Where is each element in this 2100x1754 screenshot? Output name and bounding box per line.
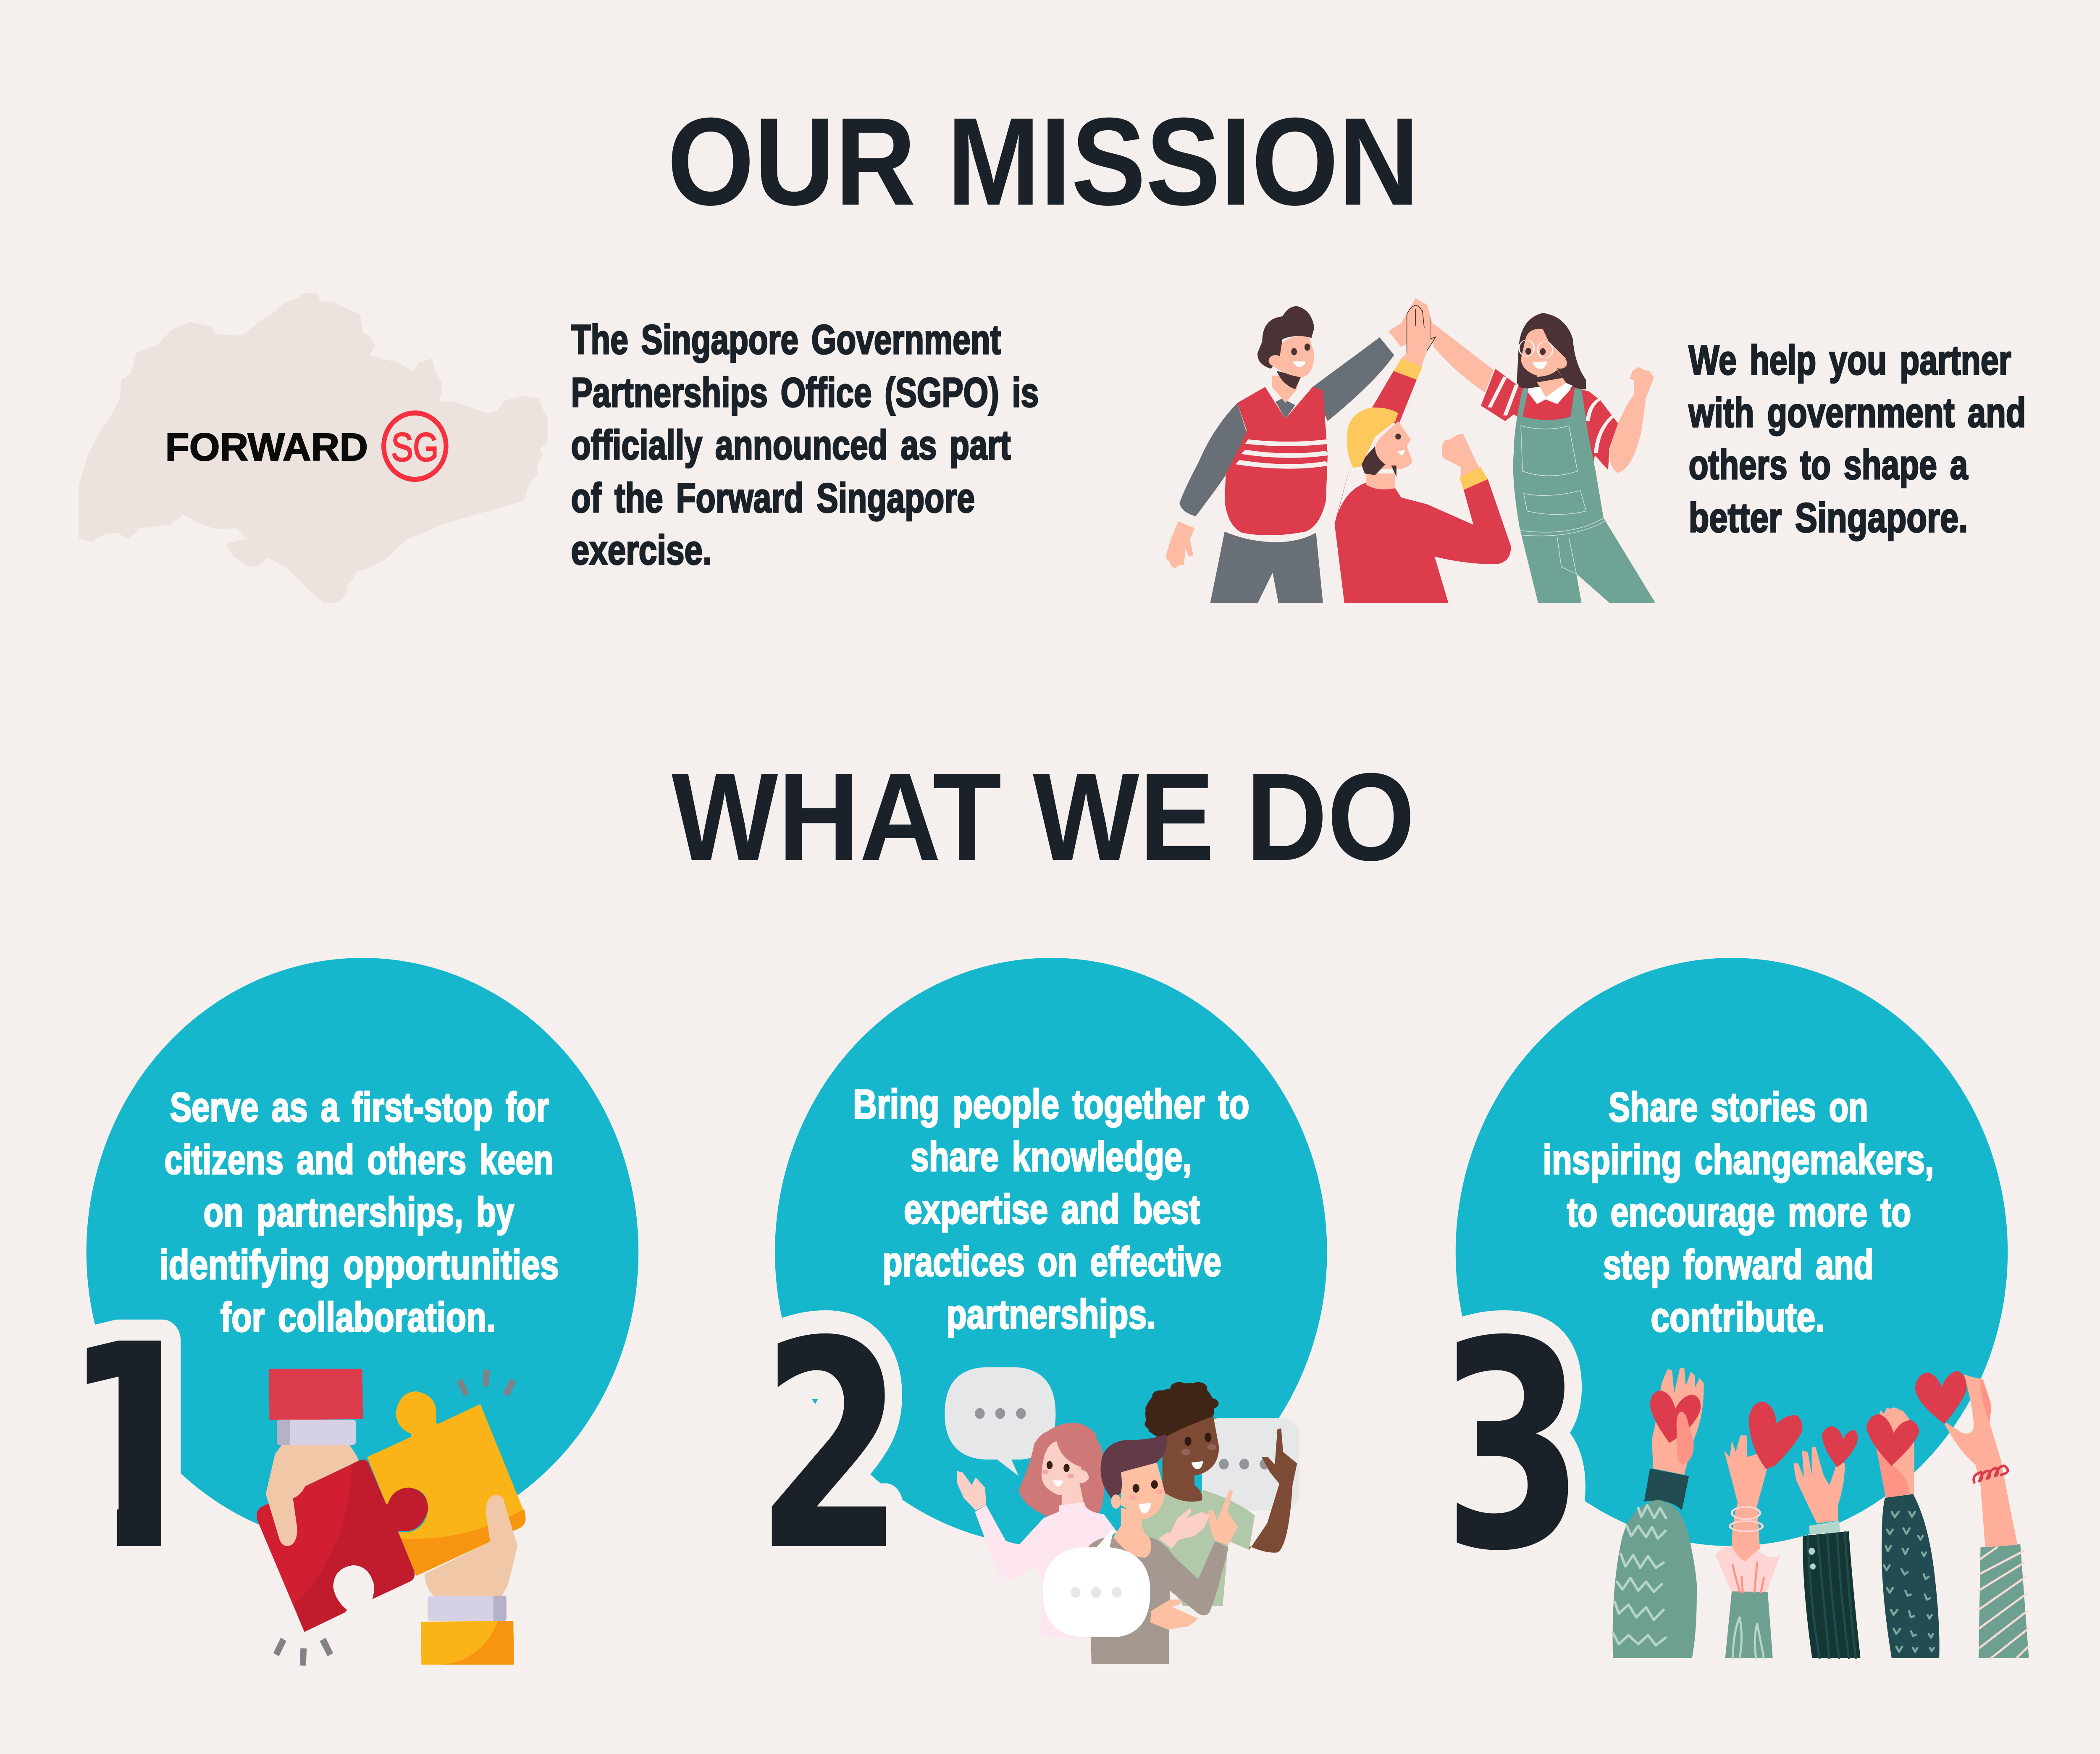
hand 4 [1866, 1407, 1940, 1658]
illustration: people high five [1166, 298, 1656, 603]
circle 1 [87, 958, 638, 1546]
woman with pink hair [957, 1423, 1117, 1639]
number 1 halo: 1 [49, 1284, 220, 1613]
number 3 halo: 3 [1436, 1281, 1585, 1614]
mission text left [571, 317, 1039, 573]
logo sg: SG [391, 424, 438, 470]
step 2 text: expertise and best [904, 1186, 1200, 1233]
illustration: people talking [811, 1367, 1299, 1664]
step 3 text: step forward and [1603, 1242, 1874, 1288]
number 2 halo: 2 [755, 1281, 905, 1614]
singapore map with forward sg logo [79, 293, 548, 603]
step 2 text: practices on effective [882, 1239, 1221, 1285]
number 3: 3 [1436, 1281, 1585, 1614]
illustration: puzzle hands [257, 1369, 525, 1666]
step 1 text [159, 1084, 559, 1341]
hand 3 [1793, 1426, 1861, 1658]
mission text right [1688, 337, 2026, 541]
panel: step 2 [755, 958, 1327, 1664]
step 3 text: Share stories on [1609, 1084, 1868, 1131]
step 1 text: identifying opportunities [159, 1242, 559, 1288]
speech bubble left [945, 1367, 1055, 1476]
title: what we do: WHAT WE DO [672, 747, 1415, 887]
speech bubble white [1043, 1527, 1150, 1637]
mission text left: The Singapore Government [571, 317, 1001, 363]
number 2: 2 [755, 1281, 905, 1614]
step 3 text: inspiring changemakers, [1543, 1137, 1934, 1183]
hand 2 [1715, 1402, 1802, 1658]
mission text left: Partnerships Office (SGPO) is [571, 370, 1039, 416]
speech bubble right [1202, 1418, 1299, 1510]
panel: step 3 [1436, 958, 2029, 1658]
panel: step 1 [49, 958, 638, 1666]
circle 3 [1456, 958, 2008, 1546]
step 3 text: contribute. [1651, 1294, 1825, 1341]
circle 2 [775, 958, 1327, 1546]
mission text right: others to shape a [1689, 442, 1968, 488]
step 1 text: for collaboration. [220, 1294, 496, 1341]
map silhouette [79, 293, 548, 603]
man in vest [1166, 298, 1433, 603]
logo wordmark: FORWARD [165, 425, 368, 469]
step 1 text: on partnerships, by [204, 1189, 514, 1236]
step 2 text: Bring people together to [853, 1081, 1250, 1128]
step 2 text: share knowledge, [911, 1134, 1192, 1180]
mission text left: officially announced as part [571, 422, 1011, 468]
step 1 text: citizens and others keen [165, 1137, 553, 1183]
step 1 text: Serve as a first-stop for [170, 1084, 549, 1131]
hand 5 [1915, 1371, 2029, 1658]
illustration: hands with hearts [1613, 1368, 2029, 1658]
mission text right: better Singapore. [1689, 495, 1968, 541]
number 1: 1 [49, 1284, 220, 1613]
number 3 counter backing [1441, 1378, 1522, 1521]
title: our mission: OUR MISSION [667, 92, 1419, 231]
hand 1 [1613, 1368, 1704, 1658]
step 3 text: to encourage more to [1567, 1189, 1911, 1236]
step 2 text: partnerships. [947, 1291, 1156, 1338]
man with purple hair [1089, 1434, 1238, 1664]
mission text left: of the Forward Singapore [571, 475, 975, 521]
number 2 counter backing [761, 1365, 832, 1437]
woman in overalls [1433, 313, 1656, 603]
man in yellow hard hat [1335, 305, 1511, 603]
step 3 text [1543, 1084, 1934, 1341]
man with curly hair [1140, 1382, 1297, 1606]
mission text right: with government and [1688, 390, 2026, 436]
mission text left: exercise. [571, 527, 712, 573]
step 2 text [853, 1081, 1250, 1338]
mission text right: We help you partner [1689, 337, 2011, 384]
logo ring [384, 413, 446, 479]
